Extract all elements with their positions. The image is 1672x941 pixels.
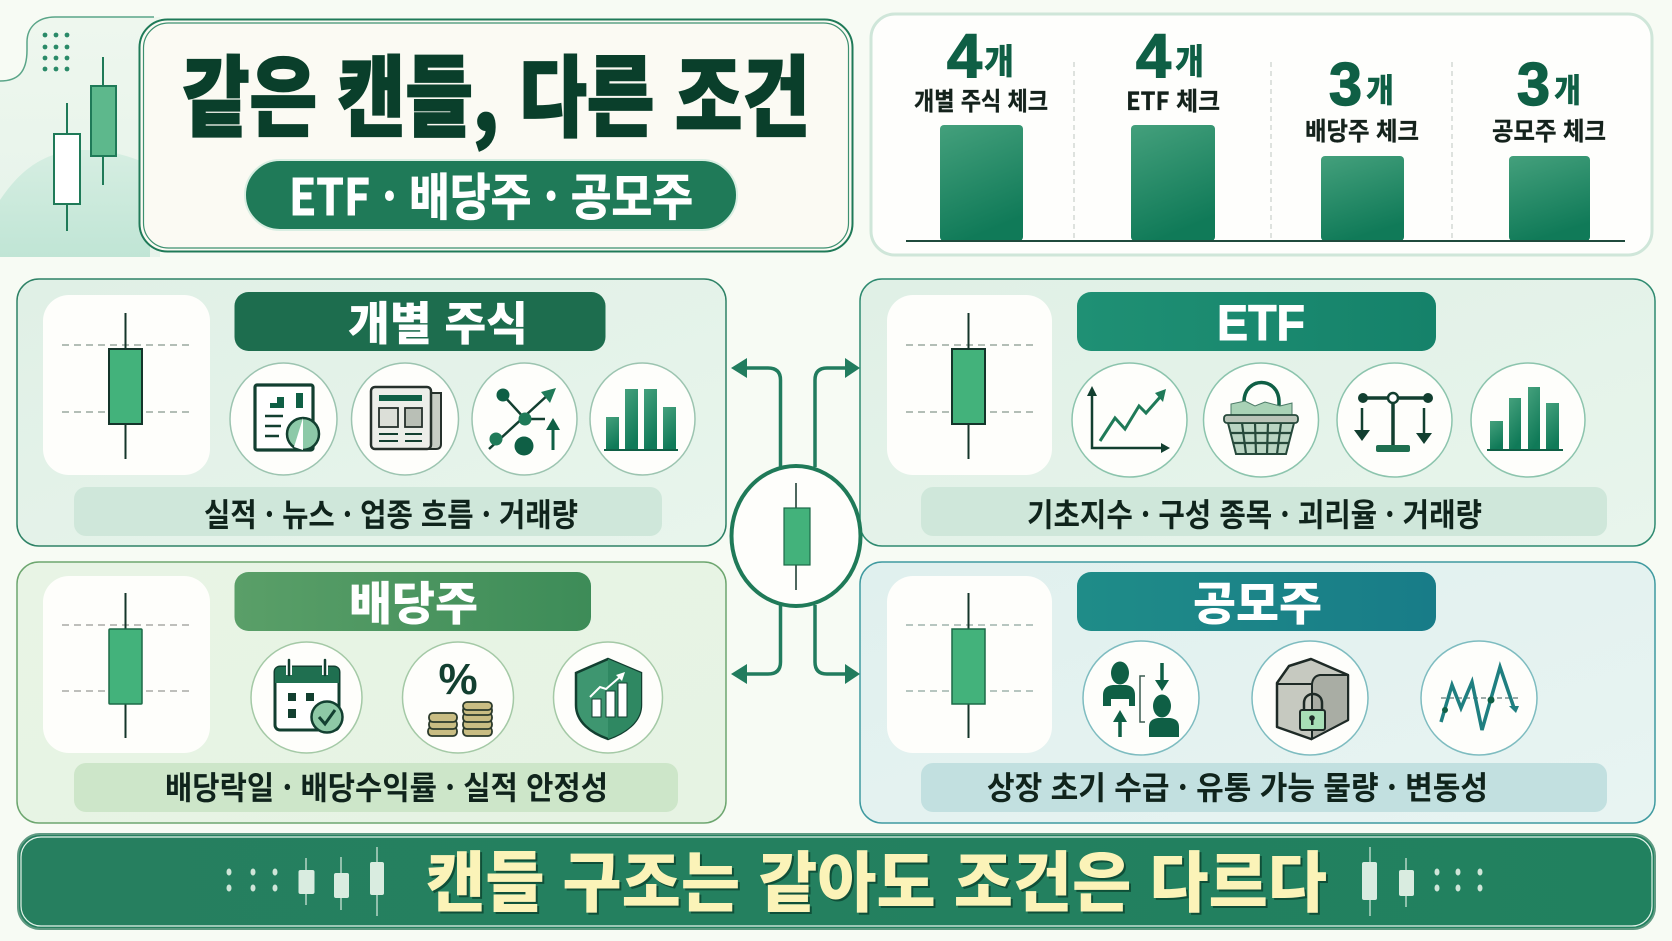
- caption: 배당락일 · 배당수익률 · 실적 안정성: [165, 763, 608, 809]
- bar: ETF: 개: [1175, 34, 1204, 85]
- icon: locked float box: [1252, 641, 1368, 755]
- candle card: [887, 576, 1052, 753]
- connector arrows: [731, 358, 860, 684]
- header: 공모주: [1193, 568, 1322, 634]
- icon: index chart: [1072, 363, 1187, 477]
- panel: 배당주: [17, 562, 726, 823]
- icon: shield with growth: [554, 642, 662, 753]
- caption: 실적 · 뉴스 · 업종 흐름 · 거래량: [204, 490, 578, 536]
- bar: 배당주: 개: [1366, 64, 1394, 112]
- check count bar chart panel: [871, 14, 1652, 255]
- bar: 개별 주식: 개: [984, 34, 1014, 85]
- bar: ETF: [1126, 22, 1220, 241]
- icon: basket: [1204, 363, 1318, 477]
- caption: [921, 487, 1607, 536]
- bottom takeaway banner: [18, 830, 1655, 929]
- icon: volume bars: [590, 363, 695, 475]
- bar: 배당주: [1305, 51, 1419, 241]
- central candle circle: [732, 466, 860, 606]
- icon: supply and demand people: [1083, 641, 1199, 755]
- left candle decoration: [226, 847, 384, 916]
- candle card: [43, 295, 210, 475]
- icon: ex-dividend calendar: [251, 642, 362, 753]
- bar: ETF: 4: [1136, 22, 1172, 91]
- header: [234, 568, 591, 634]
- right candle decoration: [1362, 847, 1482, 916]
- icon: newspaper: [352, 363, 458, 475]
- header: [1077, 292, 1436, 351]
- caption: [74, 487, 662, 536]
- decorative candlestick corner: [0, 17, 160, 257]
- panel: 공모주: [860, 562, 1655, 823]
- header: [1077, 568, 1436, 634]
- icon: earnings report: [230, 363, 337, 475]
- bar: 개별 주식: [914, 22, 1048, 241]
- header: 배당주: [349, 568, 478, 634]
- bar: 공모주: [1492, 51, 1606, 241]
- icon: yield and coins: [402, 642, 514, 753]
- bar: 공모주: 개: [1554, 64, 1581, 112]
- bar: 배당주: 배당주 체크: [1305, 112, 1419, 148]
- caption: 기초지수 · 구성 종목 · 괴리율 · 거래량: [1027, 490, 1482, 536]
- banner text: 캔들 구조는 같아도 조건은 다르다: [426, 830, 1327, 926]
- bar: 개별 주식: 4: [947, 22, 983, 91]
- bar: 개별 주식: 개별 주식 체크: [914, 82, 1048, 118]
- bar: 공모주: 3: [1517, 51, 1550, 118]
- icon: sector flow network: [472, 363, 577, 475]
- subtitle pill: ETF · 배당주 · 공모주: [289, 158, 693, 230]
- header: ETF: [1217, 295, 1305, 351]
- icon: volatility zigzag: [1421, 641, 1537, 755]
- bar: 배당주: 3: [1329, 51, 1362, 118]
- caption: 상장 초기 수급 · 유통 가능 물량 · 변동성: [987, 763, 1488, 809]
- bar: ETF: ETF 체크: [1126, 82, 1220, 118]
- candle card: [887, 295, 1052, 475]
- banner text: 캔들 구조는 같아도 조건은 다르다: [428, 832, 1329, 928]
- panel: 개별 주식: [17, 279, 726, 546]
- title text: 같은 캔들, 다른 조건: [182, 28, 810, 155]
- candle card: [43, 576, 210, 753]
- bar: 공모주: 공모주 체크: [1492, 112, 1606, 148]
- icon: balance scale: [1337, 363, 1452, 477]
- icon: yield and coins: %: [438, 655, 478, 704]
- title card: [140, 20, 852, 252]
- panel: ETF: [860, 279, 1655, 546]
- header: 개별 주식: [348, 288, 528, 354]
- icon: volume bars: [1471, 363, 1585, 477]
- header: [234, 288, 606, 354]
